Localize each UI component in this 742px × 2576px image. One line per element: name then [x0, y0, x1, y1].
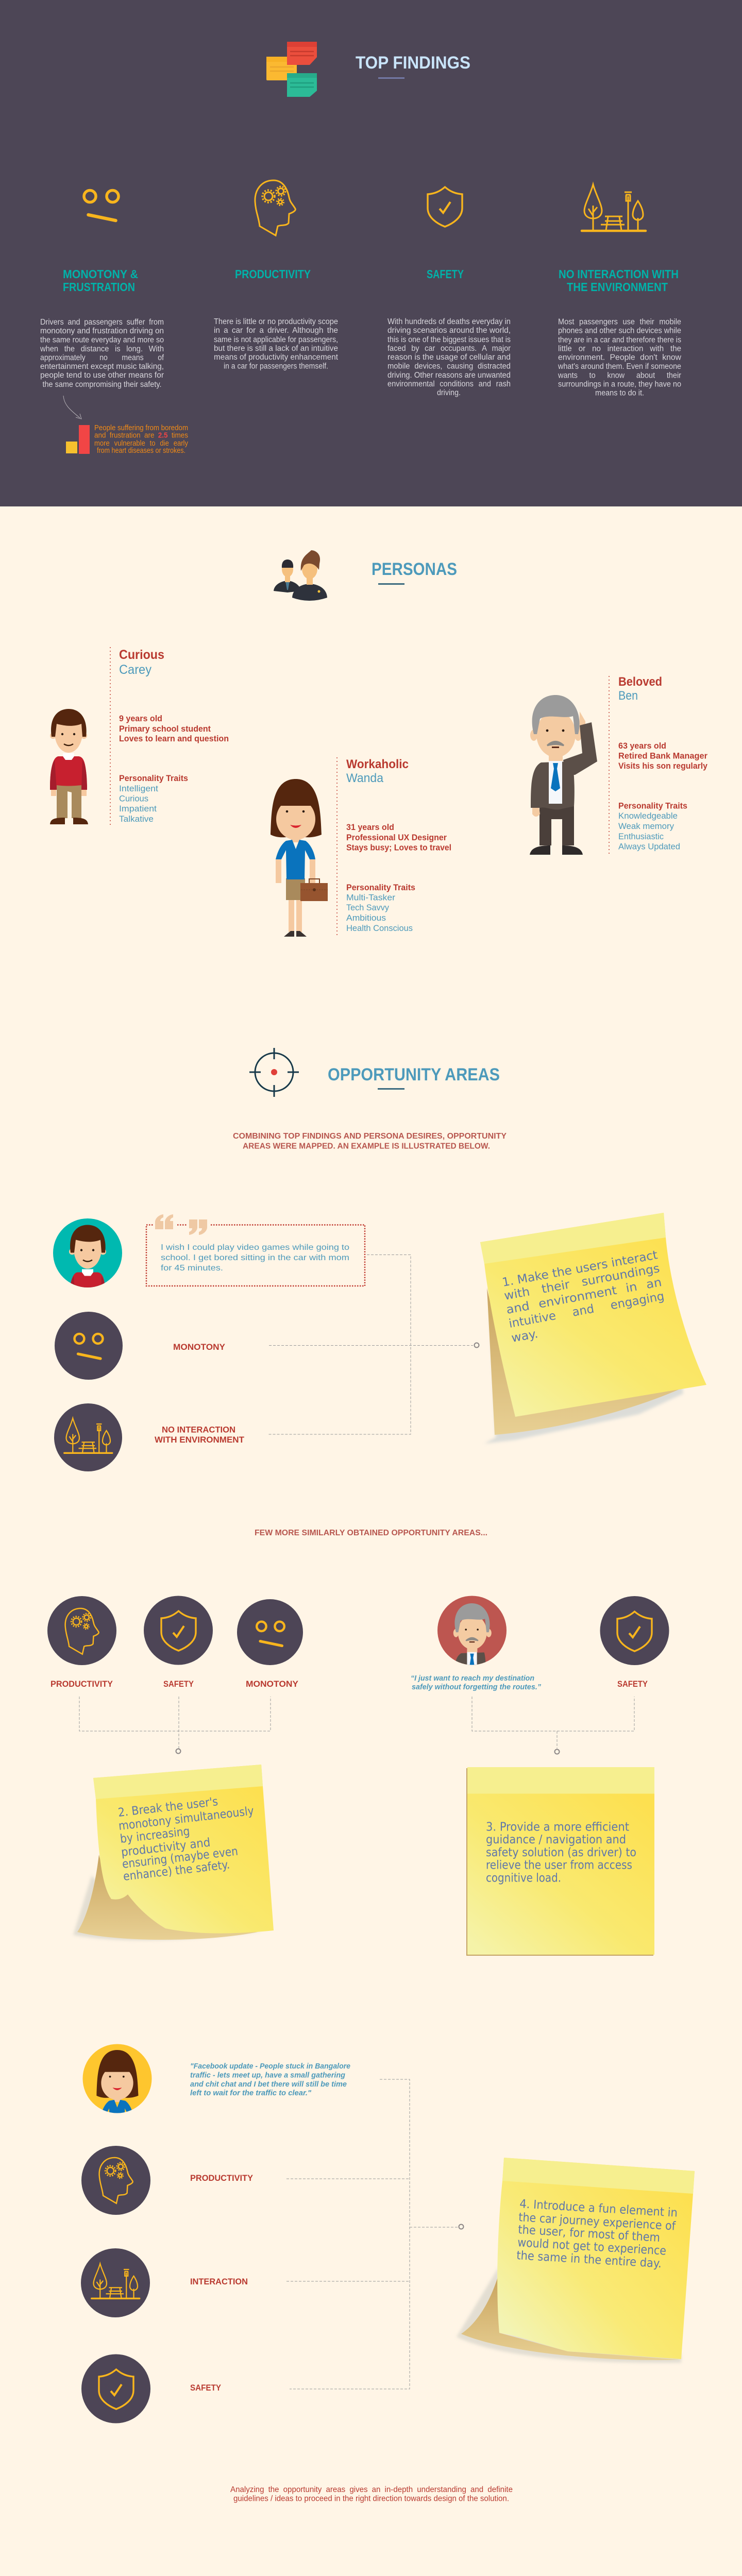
figure: Wanda	[271, 779, 328, 937]
persona text: Carey: 9 years old	[119, 714, 162, 723]
labels row: SAFETY	[163, 1679, 194, 1689]
persona text: Ben: Knowledgeable	[618, 811, 678, 821]
text block: monotony: approximately no means of	[40, 353, 164, 362]
heading: monotony and frustration: FRUSTRATION	[63, 280, 135, 294]
sticky text 2: ensuring (maybe even	[122, 1845, 239, 1871]
text block: productivity: in a car for passengers themself.	[224, 362, 328, 371]
persona text: Carey: Carey	[119, 663, 151, 677]
persona text: Carey: Primary school student	[119, 724, 211, 734]
text block: productivity: There is little or no productivity scope	[214, 317, 338, 326]
persona text: Wanda: Personality Traits	[346, 883, 415, 892]
persona text: Wanda: 31 years old	[346, 822, 394, 832]
title: top findings: TOP FINDINGS	[356, 53, 470, 73]
persona text: Wanda: Health Conscious	[346, 923, 413, 933]
persona text: Ben: Ben	[618, 689, 638, 703]
label: safety: SAFETY	[190, 2383, 222, 2393]
label: productivity: PRODUCTIVITY	[190, 2173, 254, 2183]
text block: productivity: means of productivity enhancement	[214, 353, 339, 362]
persona text: Ben: 63 years old	[618, 741, 666, 751]
sticky text 4: 4. Introduce a fun element in	[519, 2197, 678, 2220]
persona text: Wanda: Professional UX Designer	[346, 833, 447, 842]
text block: monotony: Drivers and passengers suffer from	[40, 318, 164, 327]
text block: environment: environment. People don't know	[558, 353, 682, 362]
labels row: SAFETY	[617, 1679, 648, 1689]
sticky text 2: 2. Break the user's	[117, 1795, 218, 1820]
bar chart: risk comparison	[66, 425, 90, 454]
callout: statistic: and frustration are 2.5 times	[94, 431, 188, 440]
text block: environment: wants to know about their	[558, 371, 681, 380]
text: analysis conclusion: guidelines / ideas to proceed in the right direction towards design of the solution.	[233, 2495, 509, 2503]
sticky text 1: 1. Make the users interact	[501, 1248, 659, 1290]
text block: safety: faced by car occupants. A major	[387, 344, 511, 353]
icon circle: monotony	[237, 1599, 303, 1665]
persona text: Carey	[119, 648, 229, 824]
text block: monotony: people tend to use other means for	[40, 371, 164, 380]
text block: productivity	[214, 317, 339, 371]
icon: safety shield	[428, 187, 462, 227]
heading: monotony and frustration: MONOTONY &	[63, 267, 138, 281]
sticky note 1	[480, 1213, 706, 1444]
quote: Wanda: left to wait for the traffic to clear."	[190, 2089, 312, 2097]
label: no interaction: WITH ENVIRONMENT	[155, 1435, 245, 1445]
heading: no interaction: THE ENVIRONMENT	[567, 280, 668, 294]
sticky text 1: intuitive and engaging	[508, 1290, 665, 1331]
connector lines	[79, 1697, 634, 1754]
persona text: Carey: Personality Traits	[119, 773, 188, 783]
connector lines	[268, 1255, 479, 1434]
text block: safety: mobile devices, causing distracted	[387, 362, 511, 371]
sticky text 4: the same in the entire day.	[516, 2249, 662, 2270]
text block: monotony: when the distance is long. With	[40, 345, 164, 353]
icon circle: environment	[54, 1403, 122, 1471]
quote: Ben	[411, 1674, 541, 1691]
persona text: Wanda: Multi-Tasker	[346, 892, 395, 903]
text block: opportunity intro	[233, 1132, 507, 1151]
figure: Carey	[50, 709, 88, 824]
heading: monotony and frustration	[63, 267, 138, 294]
labels row	[50, 1679, 648, 1689]
sticky note 3	[466, 1767, 654, 1956]
sticky text 2	[117, 1795, 255, 1884]
heading: personas: PERSONAS	[372, 560, 457, 579]
quote: Ben: “I just want to reach my destination	[411, 1674, 534, 1683]
quote: Ben: safely without forgetting the routes.”	[412, 1683, 541, 1691]
icon circle: safety	[81, 2354, 150, 2424]
quote box: Carey: I wish I could play video games while going to	[161, 1243, 349, 1252]
icon: coloured sticky notes	[266, 42, 317, 97]
quote box: Carey: for 45 minutes.	[161, 1264, 223, 1273]
text block: safety: driving scenarios around the world,	[387, 326, 511, 335]
persona text: Carey: Loves to learn and question	[119, 734, 229, 743]
icon circle: interaction	[81, 2248, 150, 2317]
persona text: Ben: Enthusiastic	[618, 832, 664, 841]
sticky text 2: monotony simultaneously	[118, 1804, 255, 1833]
text block: safety: driving. Other reasons are unwanted	[387, 371, 511, 380]
text block: productivity: in a car for a driver. Although the	[214, 326, 338, 335]
callout: statistic	[94, 423, 188, 455]
heading: safety: SAFETY	[427, 267, 464, 281]
persona text: Carey: Intelligent	[119, 784, 158, 793]
sticky text 2: productivity and	[121, 1836, 211, 1859]
sticky text 4: the car journey experience of	[518, 2211, 676, 2233]
persona text: Wanda: Ambitious	[346, 913, 386, 923]
persona text: Carey: Talkative	[119, 814, 154, 824]
text block: productivity: but there is still a lack of an intuitive	[214, 344, 338, 353]
text block: opportunity intro: COMBINING TOP FINDINGS AND PERSONA DESIRES, OPPORTUNITY	[233, 1132, 507, 1141]
labels row: MONOTONY	[246, 1679, 299, 1689]
avatar: Ben	[437, 1596, 507, 1665]
sticky text 1	[501, 1248, 665, 1345]
sticky text 2: by increasing	[120, 1825, 191, 1846]
figure: Ben	[530, 695, 597, 855]
icon circle: safety second	[600, 1596, 669, 1665]
persona text: Ben: Retired Bank Manager	[618, 751, 707, 761]
persona text: Ben: Visits his son regularly	[618, 761, 707, 771]
icon circle: safety	[144, 1596, 213, 1665]
heading: no interaction	[559, 267, 679, 294]
text block: environment: Most passengers use their mobile	[558, 317, 681, 327]
persona text: Ben: Beloved	[618, 675, 662, 689]
icon circle: productivity	[47, 1596, 116, 1665]
quote: Wanda: and chit chat and I bet there will still be time	[190, 2080, 347, 2089]
label: no interaction: NO INTERACTION	[162, 1425, 235, 1435]
sticky text 1: way.	[510, 1327, 539, 1345]
avatar: Wanda	[82, 2044, 151, 2113]
sticky text 4: would not get to experience	[517, 2236, 667, 2258]
quote: Wanda	[190, 2062, 350, 2097]
sticky text 3	[486, 1821, 636, 1885]
text block: environment: what's around them. Even if someone	[558, 362, 681, 371]
text block: monotony: the same compromising their safety.	[42, 380, 162, 389]
text: few more: FEW MORE SIMILARLY OBTAINED OPPORTUNITY AREAS...	[255, 1529, 487, 1537]
sticky text 3: guidance / navigation and	[486, 1833, 626, 1846]
heading: productivity: PRODUCTIVITY	[235, 267, 311, 281]
persona text: Wanda	[346, 757, 451, 933]
icon: personas	[274, 550, 327, 601]
text block: monotony	[40, 318, 164, 389]
sticky text 3: cognitive load.	[486, 1871, 561, 1885]
text block: monotony: monotony and frustration driving on	[40, 327, 164, 335]
sticky text 1: with their surroundings	[503, 1262, 661, 1303]
text block: environment: means to do it.	[595, 388, 644, 398]
sticky note 4	[457, 2158, 695, 2363]
text block: monotony: the same route everyday and more so	[40, 336, 164, 344]
sticky text 2: enhance) the safety.	[123, 1858, 230, 1884]
persona text: Ben: Personality Traits	[618, 801, 687, 811]
sticky text 4	[516, 2197, 678, 2270]
callout: statistic: from heart diseases or strokes.	[97, 446, 185, 455]
arrow: to statistic	[63, 396, 81, 419]
text block: safety: environmental conditions and rash	[387, 380, 511, 388]
sticky text 1: and environment in an	[505, 1276, 663, 1317]
text block: safety: driving.	[437, 388, 461, 397]
text block: safety: this is one of the biggest issues that is	[387, 335, 511, 344]
label: interaction: INTERACTION	[190, 2277, 248, 2286]
persona text: Wanda: Tech Savvy	[346, 903, 389, 912]
text: analysis conclusion	[230, 2485, 513, 2503]
connector lines	[286, 2079, 464, 2389]
persona text: Ben: Weak memory	[618, 821, 674, 831]
persona text: Wanda: Workaholic	[346, 757, 409, 771]
persona text: Carey: Curious	[119, 793, 148, 804]
persona text: Wanda: Wanda	[346, 771, 384, 785]
label: monotony: MONOTONY	[173, 1342, 226, 1352]
quote: Wanda: "Facebook update - People stuck in Bangalore	[190, 2062, 350, 2071]
persona text: Ben: Always Updated	[618, 842, 680, 852]
icon circle: monotony	[55, 1312, 123, 1380]
text block: environment: they are in a car and therefore there is	[558, 336, 681, 344]
heading: opportunity areas: OPPORTUNITY AREAS	[328, 1065, 500, 1084]
label: no interaction	[155, 1425, 245, 1445]
persona text: Wanda: Stays busy; Loves to travel	[346, 843, 451, 852]
icon circle: productivity	[81, 2146, 150, 2215]
heading: no interaction: NO INTERACTION WITH	[559, 267, 679, 281]
avatar: Carey	[53, 1218, 122, 1287]
persona text: Carey: Impatient	[119, 804, 157, 814]
sticky note 2	[73, 1765, 274, 1940]
icon: target	[249, 1048, 299, 1097]
callout: statistic: more vulnerable to die early	[94, 439, 188, 448]
quote: Wanda: traffic - lets meet up, have a small gathering	[190, 2071, 345, 2079]
quote box: Carey: school. I get bored sitting in the car with mom	[161, 1253, 349, 1262]
text block: environment	[558, 317, 682, 398]
icon: productivity head	[255, 180, 295, 235]
sticky text 4: the user, for most of them	[518, 2223, 661, 2245]
text block: safety: With hundreds of deaths everyday in	[387, 317, 511, 326]
text block: productivity: same is not applicable for passengers,	[214, 335, 338, 344]
text block: monotony: entertainment except music talking,	[40, 362, 164, 371]
text block: opportunity intro: AREAS WERE MAPPED. AN EXAMPLE IS ILLUSTRATED BELOW.	[243, 1142, 490, 1151]
icon: monotony face	[84, 191, 119, 221]
text block: environment: phones and other such devices while	[558, 327, 681, 335]
text block: safety: reason is the usage of cellular and	[387, 353, 511, 362]
text: analysis conclusion: Analyzing the opportunity areas gives an in-depth understanding and definite	[230, 2485, 513, 2494]
sticky text 3: relieve the user from access	[486, 1859, 632, 1872]
persona text: Carey: Curious	[119, 648, 164, 662]
text block: safety	[387, 317, 511, 397]
persona text: Ben	[618, 675, 707, 852]
icon: park environment	[582, 184, 646, 231]
text block: environment: surroundings in a route, they have no	[558, 380, 681, 388]
callout: statistic: People suffering from boredom	[94, 423, 188, 432]
panel: top findings background	[0, 0, 742, 506]
sticky text 3: 3. Provide a more efficient	[486, 1821, 629, 1834]
sticky text 3: safety solution (as driver) to	[486, 1846, 636, 1859]
quote box: Carey	[146, 1214, 365, 1286]
labels row: PRODUCTIVITY	[50, 1679, 113, 1689]
text block: environment: little or no interaction with the	[558, 344, 681, 353]
